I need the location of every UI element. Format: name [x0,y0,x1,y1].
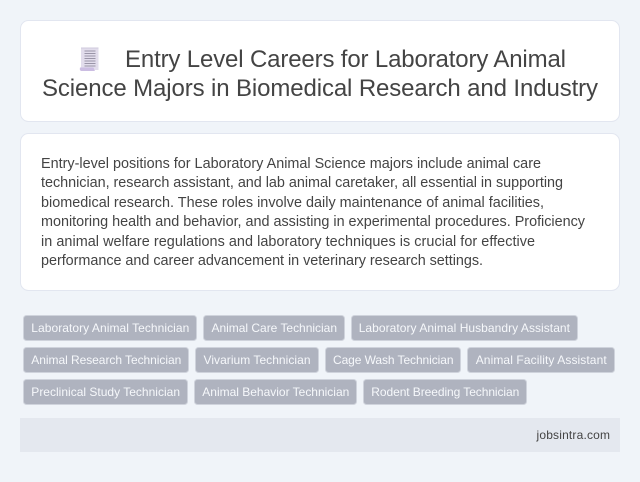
tag: Vivarium Technician: Vivarium Technician [204,353,310,367]
tag: Animal Research Technician: Animal Research Technician [31,353,181,367]
tag: Cage Wash Technician: Cage Wash Technician [333,353,454,367]
title: Entry Level Careers for Laboratory Animal [125,46,566,73]
tag: Animal Behavior Technician: Animal Behavior Technician [202,385,349,399]
tag: Laboratory Animal Husbandry Assistant [352,316,578,340]
tag: Rodent Breeding Technician: Rodent Breeding Technician [371,385,519,399]
text block: description: monitoring health and behavior, and assisting in experimental procedures. Proficiency [41,214,586,230]
tag: Animal Facility Assistant: Animal Facility Assistant [476,353,607,367]
tag: Laboratory Animal Husbandry Assistant: Laboratory Animal Husbandry Assistant [359,321,571,335]
text block: description: in animal welfare regulations and laboratory techniques is crucial for effective [41,234,535,250]
tag: Animal Care Technician [204,316,344,340]
footer bar [20,418,620,452]
title: Science Majors in Biomedical Research and Industry [42,75,598,102]
text block: description: Entry-level positions for Laboratory Animal Science majors include animal care [41,156,541,172]
title [42,46,598,102]
panel: title card [20,20,620,122]
tag: Laboratory Animal Technician: Laboratory Animal Technician [31,321,189,335]
tag: Animal Research Technician [24,348,188,372]
footer source text: jobsintra.com [536,428,610,442]
tag: Animal Behavior Technician [194,380,356,404]
text block: description: performance and career advancement in veterinary research settings. [41,253,483,269]
tag: Vivarium Technician [196,348,318,372]
panel: description card [20,134,620,290]
tag list [24,316,614,404]
tag: Laboratory Animal Technician [24,316,196,340]
text block: description: technician, research assistant, and lab animal caretaker, all essential in supporting [41,175,563,191]
tag: Cage Wash Technician [326,348,460,372]
text block: description [41,156,586,269]
tag: Animal Facility Assistant [468,348,614,372]
tag: Animal Care Technician: Animal Care Technician [212,321,337,335]
tag: Preclinical Study Technician [24,380,188,404]
tag: Preclinical Study Technician: Preclinical Study Technician [31,385,180,399]
icon: document scroll [80,48,98,71]
tag: Rodent Breeding Technician [364,380,526,404]
text block: description: biomedical research. These roles involve daily maintenance of animal facilities, [41,195,544,211]
